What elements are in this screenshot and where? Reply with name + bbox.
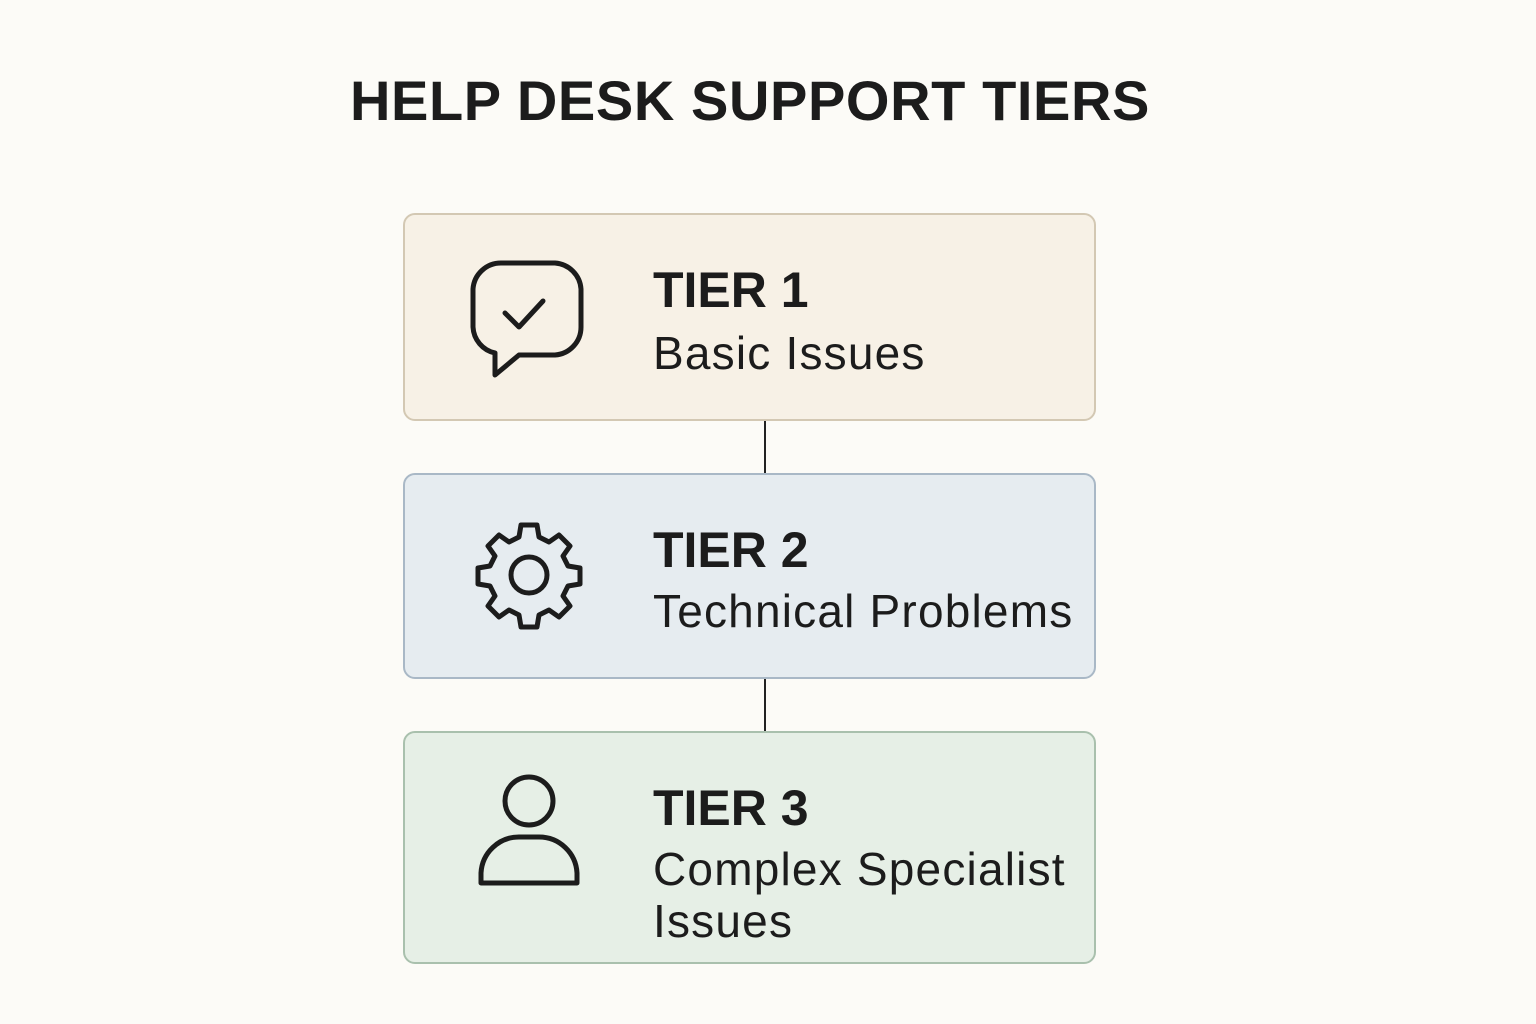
panel: tier 1 xyxy=(403,213,1096,421)
connector 2 xyxy=(764,679,766,731)
text: complex specialist issues: Complex Specialist xyxy=(653,843,1066,895)
text: complex specialist issues: Issues xyxy=(653,895,793,947)
icon: chat check xyxy=(470,260,584,378)
text: basic issues: Basic Issues xyxy=(653,327,926,379)
heading: tier 2: TIER 2 xyxy=(653,522,809,578)
icon: person xyxy=(478,774,580,886)
panel: tier 3 xyxy=(403,731,1096,964)
icon: gear xyxy=(476,522,582,630)
text: complex specialist issues xyxy=(653,843,1066,947)
text: technical problems: Technical Problems xyxy=(653,585,1073,637)
connector 1 xyxy=(764,421,766,473)
title: HELP DESK SUPPORT TIERS xyxy=(350,69,1150,132)
heading: tier 1: TIER 1 xyxy=(653,262,809,318)
heading: tier 3: TIER 3 xyxy=(653,780,809,836)
panel: tier 2 xyxy=(403,473,1096,679)
